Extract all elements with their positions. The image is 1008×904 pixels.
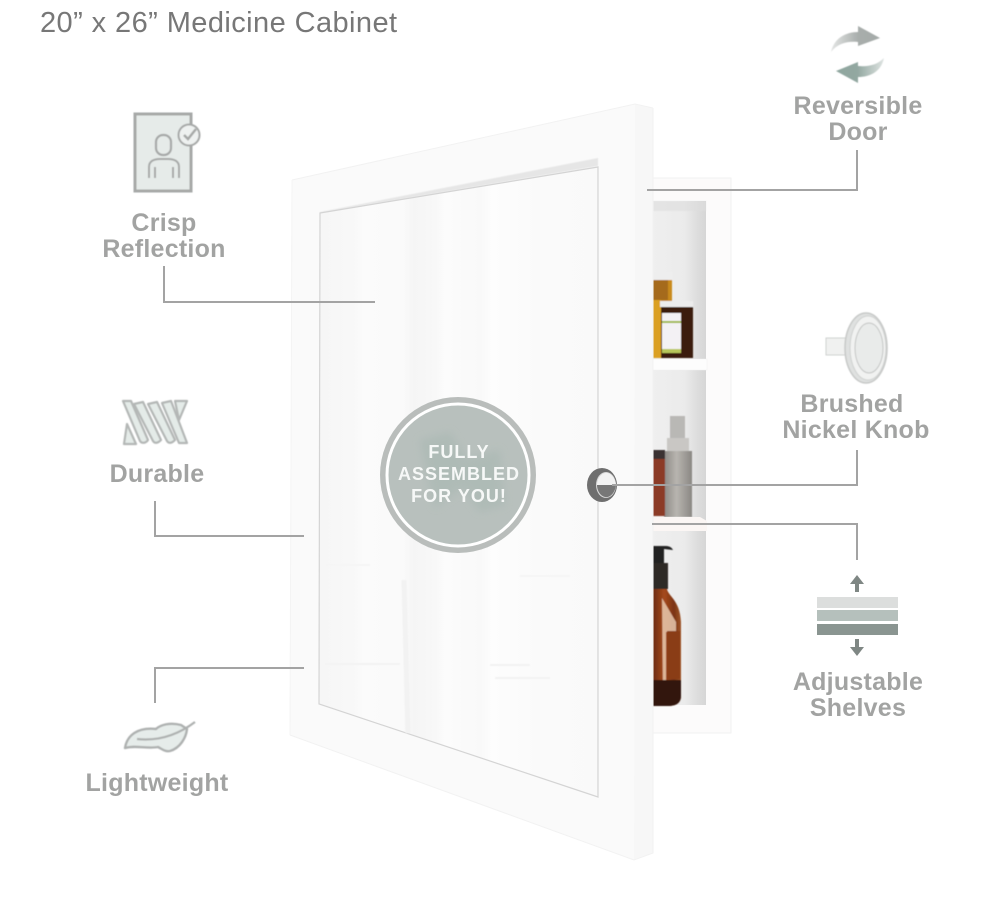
callout: crisp reflection [102, 114, 375, 302]
callout: reversible door [647, 26, 922, 190]
fully assembled badge: FULLY [428, 442, 490, 462]
callout: lightweight [86, 668, 304, 797]
icon: feather [125, 722, 195, 751]
label: Brushed [800, 390, 904, 418]
label: Nickel Knob [782, 416, 930, 444]
icon: shelves [817, 575, 898, 656]
label: Crisp [131, 209, 197, 237]
leader line [155, 668, 304, 703]
callout: durable [110, 401, 304, 536]
icon: twisted rope [123, 401, 187, 444]
mirror [319, 167, 598, 797]
label: Reflection [102, 235, 226, 263]
medicine cabinet illustration [290, 104, 731, 860]
icon: rotate arrows [831, 26, 884, 83]
fully assembled badge: ASSEMBLED [398, 464, 520, 484]
callout: adjustable shelves [652, 524, 923, 722]
label: Adjustable [793, 668, 923, 696]
door [290, 104, 653, 860]
leader line [164, 266, 375, 302]
amber pump bottle [653, 546, 681, 706]
cabinet body [650, 178, 731, 733]
label: Lightweight [86, 769, 229, 797]
icon: knob [826, 313, 887, 383]
leader line [155, 501, 304, 536]
label: Reversible [794, 92, 922, 120]
top shelf items [653, 272, 693, 358]
fully assembled badge: FOR YOU! [411, 486, 507, 506]
leader line [647, 150, 857, 190]
callout: brushed nickel knob [612, 313, 930, 485]
label: Shelves [810, 694, 906, 722]
fully assembled badge [380, 397, 536, 553]
label: Durable [110, 460, 204, 488]
leader line [612, 450, 857, 485]
shelf two [653, 517, 707, 531]
icon: mirror with person [135, 114, 200, 191]
leader line [652, 524, 857, 560]
label: Door [828, 118, 888, 146]
mirror recess [320, 158, 598, 213]
shelf one [653, 359, 707, 370]
door knob [587, 468, 617, 502]
title: 20” x 26” Medicine Cabinet [40, 7, 398, 39]
middle shelf items [653, 416, 692, 517]
